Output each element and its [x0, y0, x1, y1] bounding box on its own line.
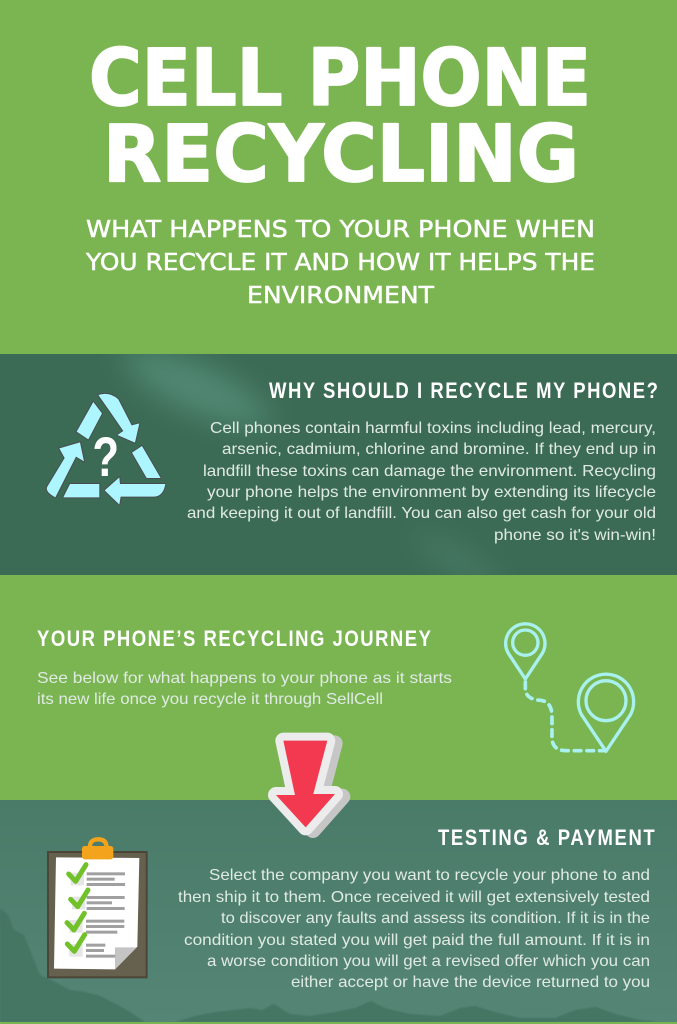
mountains backdrop — [0, 908, 660, 1022]
title: RECYCLING — [103, 110, 579, 200]
subtitle: WHAT HAPPENS TO YOUR PHONE WHEN — [86, 217, 595, 243]
subtitle — [85, 217, 595, 309]
title: CELL PHONE — [89, 34, 591, 124]
text block: why recycle body: landfill these toxins can damage the environment. Recycling — [203, 463, 656, 480]
text block: why recycle body: Cell phones contain harmful toxins including lead, mercury, — [210, 420, 656, 437]
title — [89, 34, 591, 200]
text block: testing body — [178, 867, 650, 991]
icon: map pins with dashed route — [506, 624, 634, 751]
icon: recycling triangle with question mark: ? — [92, 426, 119, 488]
arrow: red down arrow — [276, 741, 342, 830]
text block: journey body: See below for what happens to your phone as it starts — [37, 670, 452, 687]
text block: why recycle body: arsenic, cadmium, chlorine and bromine. If they end up in — [222, 441, 656, 458]
text block: why recycle body: phone so it's win-win! — [494, 527, 656, 544]
heading: testing and payment: TESTING & PAYMENT — [438, 827, 655, 850]
text block: journey body — [37, 670, 452, 708]
text block: testing body: a worse condition you will get a revised offer which you can — [207, 953, 650, 970]
panel: header background — [0, 0, 677, 354]
text block: journey body: its new life once you recycle it through SellCell — [37, 691, 383, 708]
text block: testing body: Select the company you want to recycle your phone to and — [209, 867, 650, 884]
heading: recycling journey: YOUR PHONE’S RECYCLING JOURNEY — [37, 628, 431, 651]
text block: testing body: then ship it to them. Once received it will get extensively tested — [178, 889, 650, 906]
text block: why recycle body: and keeping it out of landfill. You can also get cash for your old — [187, 505, 656, 522]
heading: why should I recycle: WHY SHOULD I RECYCLE MY PHONE? — [269, 380, 658, 403]
text block: testing body: either accept or have the device returned to you — [291, 974, 650, 991]
text block: testing body: condition you stated you will get paid the full amount. If it is in — [184, 932, 650, 949]
panel: testing and payment — [0, 800, 677, 1024]
text block: testing body: to discover any faults and assess its condition. If it is in the — [221, 910, 650, 927]
panel: recycling journey — [0, 575, 677, 800]
icon: recycling triangle with question mark — [47, 394, 165, 505]
subtitle: ENVIRONMENT — [247, 283, 435, 309]
icon: clipboard checklist — [48, 839, 147, 977]
text block: why recycle body — [187, 420, 656, 544]
text block: why recycle body: your phone helps the environment by extending its lifecycle — [207, 484, 656, 501]
panel: why should I recycle — [0, 351, 677, 590]
subtitle: YOU RECYCLE IT AND HOW IT HELPS THE — [85, 250, 595, 276]
